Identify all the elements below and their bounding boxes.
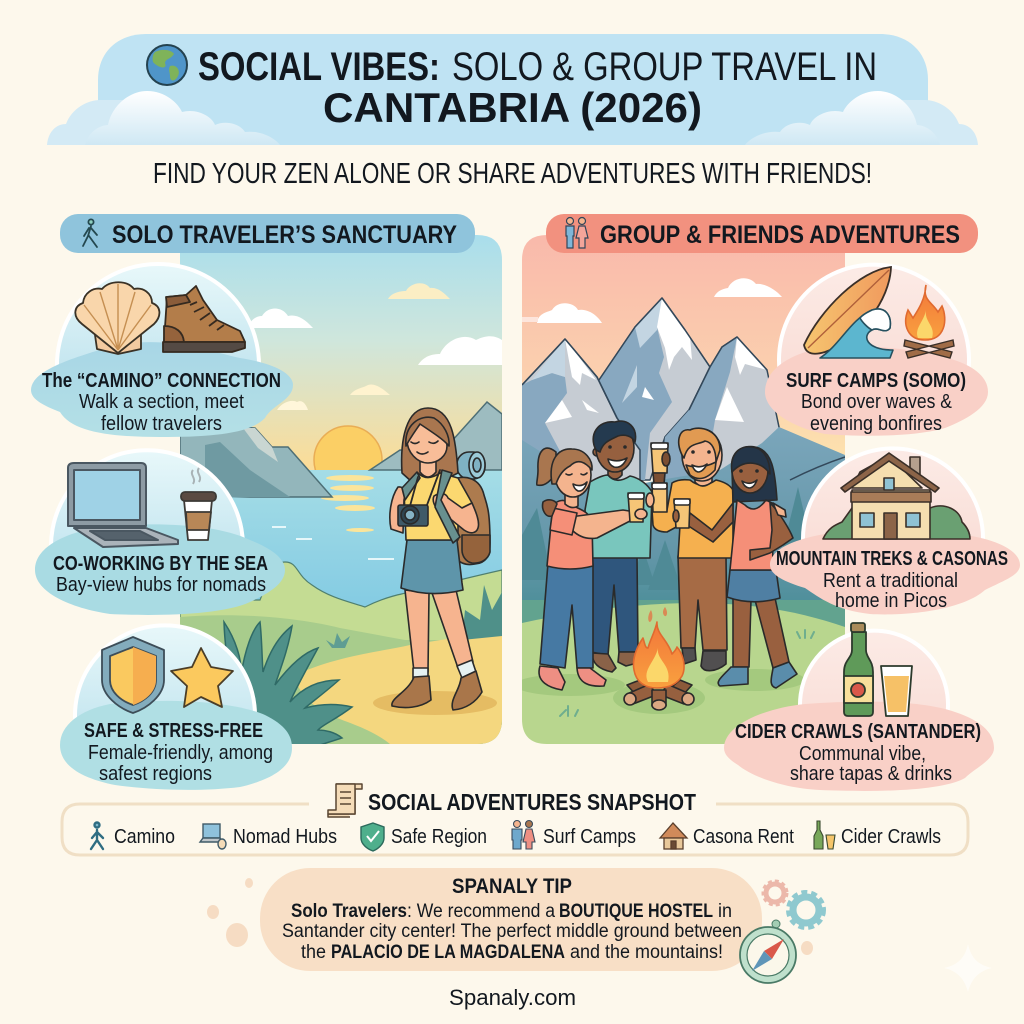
text: camino: The “CAMINO” CONNECTION <box>42 370 281 392</box>
icon: cider bottle <box>844 623 873 716</box>
person: man in orange <box>652 428 733 671</box>
legend: safe region <box>361 823 487 851</box>
legend: surf camps: Surf Camps <box>543 826 636 848</box>
legend: camino: Camino <box>114 826 175 848</box>
text: surf <box>786 370 966 435</box>
mountain right <box>370 402 502 470</box>
tip text: : We recommend a <box>407 901 555 922</box>
card: co-working <box>35 450 285 615</box>
icon: casona house <box>823 453 970 539</box>
icon: surfboard <box>804 267 891 354</box>
icon: star <box>171 648 233 707</box>
grass <box>522 603 845 744</box>
legend: camino <box>91 822 175 849</box>
sun <box>313 425 383 470</box>
left arm <box>390 487 405 533</box>
campfire <box>624 607 694 710</box>
face <box>407 423 447 463</box>
shirt <box>404 473 472 540</box>
text: safe: SAFE & STRESS-FREE <box>84 720 263 742</box>
text: camino <box>42 370 281 435</box>
icon: scroll <box>328 784 362 817</box>
small plant <box>326 633 350 648</box>
text: camino: Walk a section, meet <box>79 391 244 413</box>
tip text: Santander city center! The perfect middle ground between <box>282 921 742 942</box>
hill ridge <box>790 457 845 480</box>
icon: cider glass <box>881 666 912 716</box>
text: co-working: Bay-view hubs for nomads <box>56 574 266 596</box>
heading: SOLO TRAVELER’S SANCTUARY <box>112 221 457 249</box>
mountain shadow <box>205 442 290 497</box>
fringe <box>406 417 449 446</box>
sparkle <box>944 944 992 992</box>
text: surf: SURF CAMPS (SOMO) <box>786 370 966 392</box>
beer mugs <box>628 443 690 528</box>
icon: scallop shell <box>75 282 159 354</box>
icon: coffee cup <box>181 468 216 540</box>
text: mountain <box>776 548 1008 612</box>
backpack <box>452 477 490 565</box>
heading: GROUP & FRIENDS ADVENTURES <box>600 221 960 249</box>
text: safe <box>84 720 273 785</box>
tip text: the <box>301 942 326 963</box>
shorts <box>401 540 463 594</box>
icon: laptop <box>68 463 178 547</box>
panel: group scene <box>515 235 845 744</box>
bush <box>224 622 352 745</box>
tip text: in <box>718 901 732 922</box>
text: surf: evening bonfires <box>810 413 942 435</box>
group of friends <box>537 421 797 710</box>
neck <box>420 460 436 477</box>
boots <box>392 671 482 710</box>
pack straps <box>402 470 460 543</box>
sky clouds <box>248 283 502 410</box>
socks <box>413 660 476 679</box>
dark grass band <box>522 600 845 627</box>
text: cider: share tapas & drinks <box>790 763 952 785</box>
legs <box>405 590 473 672</box>
woman traveler <box>390 408 490 710</box>
card: surf camps <box>765 265 988 436</box>
text: cider: Communal vibe, <box>799 743 926 765</box>
legend: nomad hubs: Nomad Hubs <box>233 826 337 848</box>
section pill: solo <box>60 214 475 253</box>
card: safe and stress-free <box>60 625 292 790</box>
text: mountain: home in Picos <box>835 590 947 612</box>
sand path <box>295 630 502 744</box>
center mountain <box>599 298 710 480</box>
tip text <box>282 901 742 963</box>
camera strap <box>410 470 440 506</box>
legend: nomad hubs <box>200 824 337 849</box>
ground shadows <box>515 669 805 714</box>
icon: wave <box>820 309 893 358</box>
water glints <box>272 526 394 560</box>
decorative dots <box>207 878 813 955</box>
panel: solo scene <box>180 235 502 745</box>
tip text: BOUTIQUE HOSTEL <box>559 901 713 922</box>
hair <box>402 408 458 482</box>
land <box>180 562 502 744</box>
person: man in teal <box>585 421 652 672</box>
legend: cider crawls: Cider Crawls <box>841 826 941 848</box>
snapshot heading: SOCIAL ADVENTURES SNAPSHOT <box>368 789 696 815</box>
legend: casona rent <box>660 823 794 849</box>
text: camino: fellow travelers <box>101 413 222 435</box>
title: SOCIAL VIBES: <box>198 45 440 89</box>
text: surf: Bond over waves & <box>801 391 953 413</box>
trees <box>522 488 804 590</box>
icon: globe <box>147 45 187 85</box>
forest hills <box>522 427 845 600</box>
darker grass <box>180 615 502 744</box>
group clouds <box>522 278 782 323</box>
card: mountain treks <box>770 448 1020 614</box>
title: SOLO & GROUP TRAVEL IN <box>452 45 877 89</box>
legend: safe region: Safe Region <box>391 826 487 848</box>
icon: shield <box>102 637 164 713</box>
mountain highlight <box>243 428 278 462</box>
camera <box>398 505 428 526</box>
icon: couple <box>566 218 588 248</box>
water <box>232 470 502 606</box>
tip text: Solo Travelers <box>291 901 407 922</box>
callout: spanaly tip <box>260 868 762 971</box>
icon: teal gear <box>788 892 824 928</box>
facial features <box>411 441 438 454</box>
card: camino connection <box>31 264 293 437</box>
title banner <box>47 34 978 145</box>
title: CANTABRIA (2026) <box>323 84 702 131</box>
title <box>198 45 877 131</box>
icon: compass <box>740 920 796 983</box>
card: cider crawls <box>724 623 994 791</box>
panel: snapshot legend <box>62 784 968 855</box>
right arm <box>433 494 479 533</box>
right mountain <box>664 336 780 480</box>
icon: pink gear <box>763 881 787 905</box>
person: woman with ponytail <box>537 448 642 690</box>
text: cider: CIDER CRAWLS (SANTANDER) <box>735 721 981 743</box>
grass tufts <box>560 630 814 716</box>
bedroll <box>457 452 485 479</box>
legend: surf camps <box>512 820 636 849</box>
text: co-working: CO-WORKING BY THE SEA <box>53 553 268 575</box>
text: co-working <box>53 553 268 596</box>
bush right <box>462 585 502 640</box>
icon: hiking boot <box>163 286 245 352</box>
legend: cider crawls <box>814 821 941 849</box>
tip text: PALACIO DE LA MAGDALENA <box>331 942 565 963</box>
sun reflection <box>321 475 375 532</box>
website footer: Spanaly.com <box>449 985 576 1010</box>
woman shadow <box>373 691 497 715</box>
tip text: and the mountains! <box>570 942 723 963</box>
left mountain <box>522 339 640 490</box>
text: safe: safest regions <box>99 763 212 785</box>
text: mountain: Rent a traditional <box>823 570 958 592</box>
text: cider <box>735 721 981 785</box>
icon: hiker <box>83 219 97 247</box>
text: safe: Female-friendly, among <box>88 742 273 764</box>
legend: casona rent: Casona Rent <box>693 826 794 848</box>
tip heading: SPANALY TIP <box>452 875 572 898</box>
mountains left <box>180 425 332 497</box>
section pill: group <box>546 214 978 253</box>
icon: bonfire <box>904 285 954 358</box>
person: woman with dark hair <box>687 447 797 688</box>
